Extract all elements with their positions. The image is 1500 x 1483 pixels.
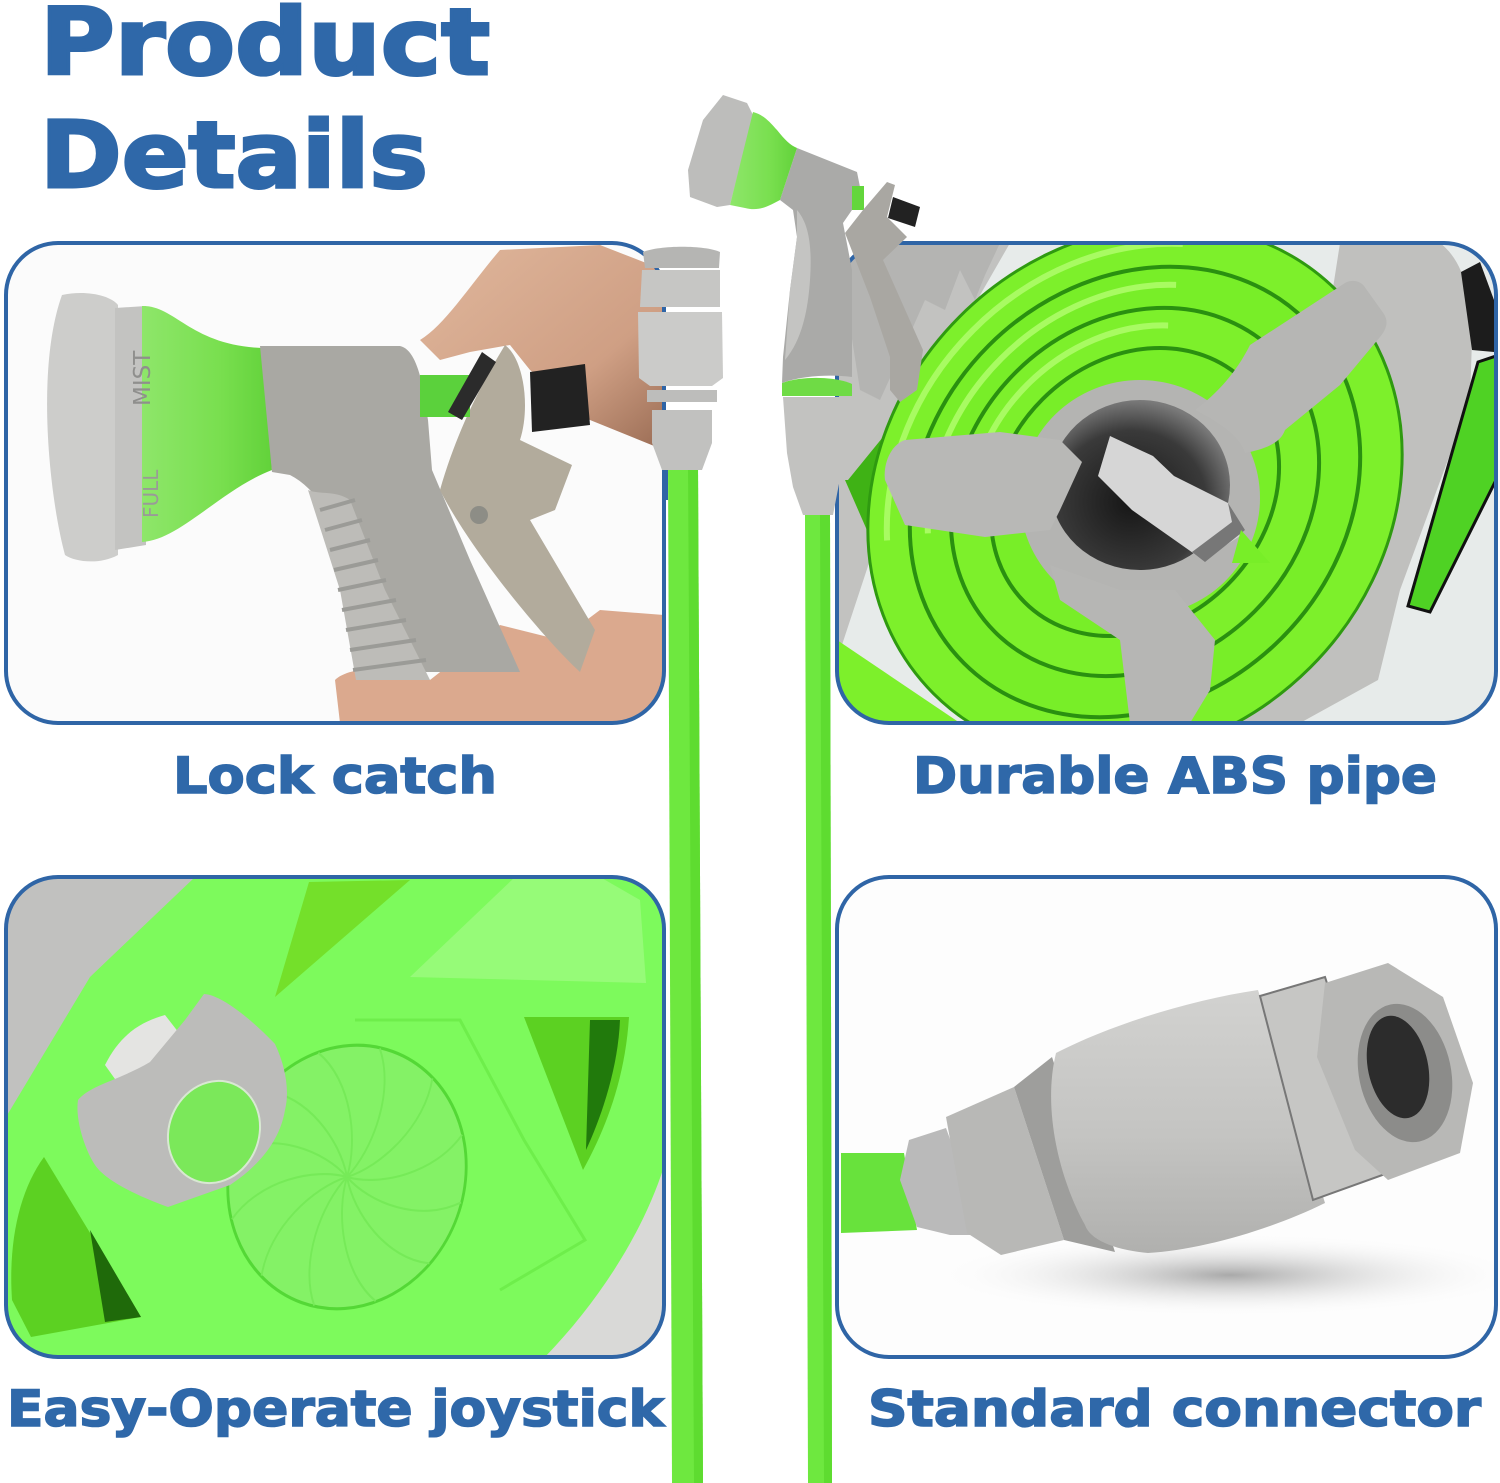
icon: gun black knob xyxy=(888,197,920,227)
icon: connector sleeve xyxy=(1260,977,1388,1200)
icon: hub cavity xyxy=(1050,400,1230,570)
panel: easy-operate joystick xyxy=(6,877,666,1357)
icon: hose clamp xyxy=(1192,503,1245,562)
icon: green knob center xyxy=(153,1067,275,1197)
icon: lever xyxy=(440,345,595,672)
icon: hex plate edge xyxy=(355,1020,585,1290)
icon: light plate xyxy=(410,877,646,983)
panel: lock catch xyxy=(6,243,664,723)
icon: green bell xyxy=(142,306,272,542)
icon: gun grip ribs xyxy=(785,210,811,360)
icon: reel hub xyxy=(1020,380,1260,616)
icon: grey housing corner xyxy=(547,1172,662,1355)
icon: lock clip xyxy=(448,352,496,420)
icon: coiled hose xyxy=(866,245,1404,721)
icon: gun lever xyxy=(845,182,923,402)
icon: gun nozzle head xyxy=(688,95,753,207)
label: MIST: MIST xyxy=(130,350,156,406)
icon: connector tail xyxy=(900,1128,985,1235)
icon: gun green ring xyxy=(782,378,852,396)
icon: gun green bell xyxy=(730,112,797,209)
panel: durable ABS pipe xyxy=(835,241,1498,725)
icon: hose top window xyxy=(275,880,410,997)
icon: gun body xyxy=(780,148,860,383)
title: Details xyxy=(40,102,428,209)
icon: connector body xyxy=(1051,990,1325,1253)
title xyxy=(40,0,490,209)
icon: hand holding bottom xyxy=(335,610,664,723)
icon: gun trigger pin xyxy=(852,186,864,210)
icon: handle left xyxy=(885,432,1082,537)
heading: Standard connector: Standard connector xyxy=(868,1380,1481,1438)
icon: handle bottom xyxy=(1054,580,1215,721)
heading: Lock catch: Lock catch xyxy=(173,747,497,805)
icon: lower hose xyxy=(837,640,960,723)
icon: thread opening xyxy=(1345,995,1465,1151)
icon: grey joystick knob xyxy=(77,994,287,1207)
icon: black strap xyxy=(1461,262,1494,352)
icon: front nut xyxy=(1317,963,1473,1180)
icon: gun connector xyxy=(783,397,851,515)
heading: Easy-Operate joystick: Easy-Operate joystick xyxy=(7,1380,666,1438)
icon: black knob xyxy=(530,364,590,432)
icon: nozzle dial xyxy=(115,306,146,550)
icon: thread interior xyxy=(1358,1010,1438,1124)
icon: handle right xyxy=(1195,281,1387,453)
icon: floor shadow xyxy=(930,1233,1500,1317)
icon: connector flange xyxy=(1014,1057,1115,1252)
icon: left housing xyxy=(837,243,1010,660)
icon: hose right window xyxy=(524,1017,629,1170)
icon: grip rib lines xyxy=(320,500,426,670)
icon: hose tip xyxy=(1232,530,1258,563)
icon: pistol body xyxy=(260,346,520,672)
icon: right housing xyxy=(1243,245,1472,721)
icon: left hose with connector xyxy=(638,247,723,1483)
icon: knob axle xyxy=(105,1015,200,1100)
icon: green hose stub xyxy=(841,1153,917,1233)
icon: elbow pipe xyxy=(1098,436,1240,560)
panel: standard connector xyxy=(837,877,1500,1357)
icon: spiral disc xyxy=(226,1044,468,1310)
heading: Durable ABS pipe: Durable ABS pipe xyxy=(913,747,1437,805)
icon: hose left window xyxy=(11,1157,141,1337)
label: FULL: FULL xyxy=(139,469,163,518)
icon: grip ribs xyxy=(308,490,430,680)
icon: right hose with spray gun xyxy=(688,95,923,1483)
icon: hand holding top xyxy=(420,245,664,450)
icon: grey housing xyxy=(6,877,195,1117)
icon: spray nozzle head xyxy=(47,293,118,561)
icon: green side plate xyxy=(1408,356,1496,612)
icon: green pin xyxy=(420,375,470,417)
icon: connector collar xyxy=(946,1087,1064,1255)
icon: lever rivet xyxy=(470,506,488,524)
